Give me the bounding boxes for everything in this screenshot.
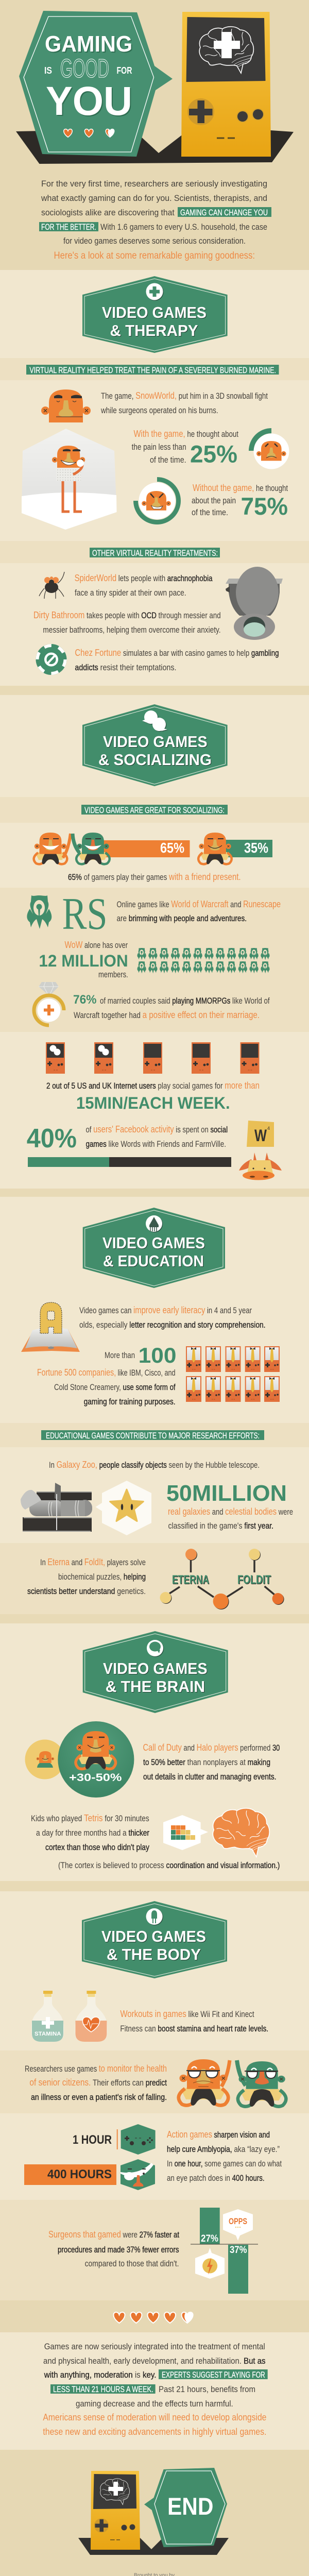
title: gaming is good for you <box>44 31 132 124</box>
text: tetris: a day for three months had a thicker <box>36 1828 149 1838</box>
banner: other treatments <box>90 548 220 558</box>
icon: brain in circle <box>147 1640 164 1657</box>
circle: player: +30-50% <box>69 1772 122 1784</box>
text: snowworld: The game, SnowWorld, put him in a 3D snowball fight <box>101 390 268 401</box>
diagram: molecule: FOLDIT <box>237 1573 271 1587</box>
bar: 400 hours <box>24 2164 116 2185</box>
stat: without the game 75%: about the pain <box>192 496 236 505</box>
stat: 40 percent facebook: of users' Facebook activity is spent on social <box>85 1124 228 1134</box>
icon: scrabble tile: W <box>254 1126 267 1145</box>
stat: 15 minutes each week: 15MIN/EACH WEEK. <box>76 1094 230 1112</box>
text: 76 percent: 76% <box>73 993 97 1007</box>
console small <box>91 2471 140 2550</box>
title: gaming is good for you: IS <box>44 65 52 76</box>
stat: 40 percent facebook <box>27 1124 228 1154</box>
text: dirty bathroom: messier bathrooms, helping them overcome their anxiety. <box>43 625 221 635</box>
text: dirty bathroom: Dirty Bathroom takes people with OCD through messier and <box>33 609 221 620</box>
conclusion text block: Games are now seriously integrated into the treatment of mental <box>44 2342 265 2351</box>
text: workouts <box>120 2008 268 2033</box>
text: surgeons <box>48 2229 179 2268</box>
text: surgeons: compared to those that didn't. <box>85 2259 179 2268</box>
text: 76 percent: Warcraft together had a positive effect on their marriage. <box>74 1009 260 1020</box>
icon: resting patient face <box>41 389 91 422</box>
heading: video games and the body <box>82 1901 227 1978</box>
intro text block: With 1.6 gamers to every U.S. household, the case <box>100 223 267 232</box>
icon: heart potion <box>75 1991 107 2042</box>
heading: video games and the body: VIDEO GAMES <box>101 1927 206 1945</box>
icon: toilet <box>226 567 283 640</box>
diagram: molecule <box>160 1549 284 1609</box>
stat: without the game 75%: Without the game, he thought <box>193 482 288 493</box>
callout: lightning hexagon <box>195 2248 225 2279</box>
stat: 40 percent facebook: 40% <box>27 1124 77 1154</box>
text: tetris <box>31 1812 150 1852</box>
icon: diamond ring <box>34 982 64 1025</box>
stat: 50 million: 50MILLION <box>166 1481 287 1506</box>
stat: 12 million: 12 MILLION <box>39 952 128 970</box>
conclusion text block: EXPERTS SUGGEST PLAYING FOR <box>162 2370 265 2380</box>
stat: 15 minutes each week <box>46 1080 260 1112</box>
text: snowworld <box>100 390 268 415</box>
icon: controller hexagon <box>121 2124 156 2155</box>
five hearts <box>114 2312 193 2323</box>
stat: 100 fortune 500 companies <box>37 1343 176 1406</box>
end speech bubble <box>144 2468 227 2547</box>
icon: figure in circle <box>146 1908 163 1925</box>
text: action games: help cure Amblyopia, aka “lazy eye.” <box>167 2145 280 2154</box>
heading: video games and education: VIDEO GAMES <box>102 1234 205 1252</box>
heading: video games and education <box>83 1208 225 1288</box>
text: call of duty and halo: Call of Duty and Halo players performed 30 <box>143 1742 280 1753</box>
text: senior citizens: Researchers use games to monitor the health <box>25 2063 167 2074</box>
bar: 400 hours: 400 HOURS <box>47 2167 112 2181</box>
callout: opps hexagon: OPPS <box>229 2216 247 2226</box>
conclusion text block: and physical health, early development, and rehabilitation. But as <box>43 2357 266 2366</box>
text: tetris: cortex than those who didn't play <box>45 1843 150 1852</box>
icon: book with letter A <box>21 1302 80 1352</box>
end notch <box>140 2538 163 2549</box>
stat: 50 million: classified in the game's first year. <box>168 1521 273 1531</box>
bar: 65 percent <box>104 840 190 857</box>
banner: great for socializing <box>81 805 228 815</box>
text: action games: Action games sharpen vision and <box>167 2129 270 2140</box>
text: chez fortune: Chez Fortune simulates a bar with casino games to help gambling <box>75 647 279 658</box>
character: orange gamer <box>34 833 71 864</box>
title: gaming is good for you: GOOD <box>60 54 109 83</box>
stat: 15 minutes each week: 2 out of 5 US and UK Internet users play social games for more than <box>46 1080 260 1091</box>
text: online games: Online games like World of Warcraft and Runescape <box>116 899 281 909</box>
stat: 100 fortune 500 companies: Cold Stone Creamery, use some form of <box>54 1383 176 1392</box>
stat: with the game 25%: 25% <box>190 440 237 468</box>
stat: 100 fortune 500 companies: gaming for training purposes. <box>84 1397 176 1406</box>
icon: star in speech hexagon <box>96 1481 151 1535</box>
icon: pencil in circle <box>146 1215 163 1232</box>
end ground shadow <box>78 2538 229 2555</box>
illustration: patient throwing snowball <box>22 429 116 530</box>
heading: video games and the body: & THE BODY <box>107 1945 201 1963</box>
stat: with the game 25%: With the game, he thought about <box>134 428 238 439</box>
conclusion text block: Americans sense of moderation will need to develop alongside <box>43 2412 266 2422</box>
stat: 50 million: real galaxies and celestial bodies were <box>168 1506 293 1517</box>
text: action games <box>167 2129 282 2183</box>
end speech bubble: END <box>167 2493 213 2520</box>
stat: 100 fortune 500 companies: Fortune 500 companies, like IBM, Cisco, and <box>37 1367 176 1378</box>
intro text block <box>39 179 271 261</box>
text: call of duty and halo: out details in clutter and managing events. <box>143 1772 276 1782</box>
text: spiderworld: face a tiny spider at their own pace. <box>75 588 186 598</box>
panel: hero <box>16 11 294 164</box>
text: senior citizens <box>25 2063 167 2102</box>
conclusion text block: gaming decrease and the effects turn harmful. <box>76 2399 233 2409</box>
intro text block: FOR THE BETTER. <box>41 223 96 232</box>
bar: 35 percent <box>226 840 272 857</box>
conclusion text block: LESS THAN 21 HOURS A WEEK. <box>53 2385 153 2394</box>
panel: end <box>78 2468 229 2576</box>
panel: video games and education <box>21 1208 293 1609</box>
heading: video games and therapy: VIDEO GAMES <box>102 303 207 321</box>
heading: video games and socializing: & SOCIALIZING <box>98 751 212 769</box>
conclusion text block: these new and exciting advancements in highly virtual games. <box>43 2427 266 2437</box>
bar: 65 percent: 65% <box>160 840 184 856</box>
icon: tetris blocks in speech hexagon <box>163 1815 208 1850</box>
icon: spider <box>39 572 64 599</box>
banner: other treatments: OTHER VIRTUAL REALITY TREATMENTS: <box>92 549 218 558</box>
bar chart: 65 with friends vs 35 without <box>34 833 272 864</box>
label: 1 hour <box>73 2129 118 2149</box>
intro text block: For the very first time, researchers are seriously investigating <box>41 179 267 189</box>
character: solo gamer <box>198 833 232 864</box>
heading: video games and the brain: & THE BRAIN <box>106 1677 205 1696</box>
heading: video games and the brain: VIDEO GAMES <box>103 1659 208 1677</box>
text: spiderworld <box>75 572 213 598</box>
text: dirty bathroom <box>33 609 221 635</box>
handheld console <box>181 12 271 157</box>
hero ground shadow <box>16 130 294 164</box>
intro text block: what exactly gaming can do for you. Scientists, therapists, and <box>41 194 267 203</box>
stat: 100 fortune 500 companies: 100 <box>139 1343 176 1367</box>
text: 76 percent <box>73 993 270 1020</box>
text: 65 percent: 65% of gamers play their games with a friend present. <box>68 871 241 882</box>
icon: scrabble tile: 4 <box>267 1126 270 1131</box>
banner: great for socializing: VIDEO GAMES ARE GREAT FOR SOCIALIZING: <box>84 806 225 815</box>
bar: 27 percent faster <box>200 2208 220 2244</box>
text: call of duty and halo <box>143 1742 280 1782</box>
panel: video games and the body <box>24 1901 286 2294</box>
icon: scrabble tile <box>247 1121 274 1147</box>
logo: runescape: RS <box>62 889 107 939</box>
text: chez fortune <box>75 647 279 672</box>
text: online games: are brimming with people and adventures. <box>116 914 247 923</box>
title: gaming is good for you: GAMING <box>45 31 132 57</box>
text: 76 percent: of married couples said playing MMORPGs like World of <box>100 996 270 1006</box>
stat: 12 million <box>39 939 128 979</box>
console d-pad <box>187 98 214 125</box>
diagram: molecule: ETERNA <box>172 1573 209 1587</box>
conclusion text block <box>43 2342 268 2437</box>
characters: senior gamers high five <box>179 2059 286 2107</box>
intro text block: for video games deserves some serious consideration. <box>63 236 246 246</box>
panel: video games and therapy <box>22 276 289 675</box>
text: senior citizens: an illness or even a patient's risk of falling. <box>31 2093 167 2102</box>
bar: 35 percent: 35% <box>244 840 268 856</box>
heading: video games and socializing: VIDEO GAMES <box>103 733 208 751</box>
text: chez fortune: addicts resist their temptations. <box>75 663 176 672</box>
character: green senior <box>237 2060 286 2107</box>
pictogram: consoles wearing ties <box>186 1346 280 1402</box>
bar: 37 percent fewer errors: 37% <box>230 2245 247 2256</box>
text: online games <box>116 899 281 923</box>
three hearts <box>64 129 114 137</box>
text: spiderworld: SpiderWorld lets people with arachnophobia <box>75 572 213 583</box>
text: tetris: Kids who played Tetris for 30 minutes <box>31 1812 149 1823</box>
text: workouts: Fitness can boost stamina and heart rate levels. <box>120 2024 268 2033</box>
text: action games: an eye patch does in 400 hours. <box>167 2174 265 2183</box>
bar: 40 percent progress <box>28 1157 231 1167</box>
character: green gamer <box>73 833 110 864</box>
bar: 27 percent faster: 27% <box>201 2233 218 2244</box>
circle: player <box>58 1721 134 1798</box>
circle: non-player <box>25 1739 65 1780</box>
panel: video games and the brain <box>25 1631 280 1870</box>
icon grid: horde crests <box>137 948 270 973</box>
title: gaming is good for you: YOU <box>46 78 132 124</box>
stat: with the game 25%: the pain less than <box>132 443 186 452</box>
panel: video games and socializing <box>27 704 282 1180</box>
icon: plus in circle <box>146 283 164 301</box>
intro text block: sociologists alike are discovering that <box>41 208 175 217</box>
heading: video games and socializing <box>82 704 228 786</box>
text: early literacy: Video games can improve early literacy in 4 and 5 year <box>79 1304 252 1315</box>
donut: 25 percent with sad face <box>251 431 289 469</box>
icon: eye patch face hexagon <box>121 2159 155 2190</box>
text: surgeons: procedures and made 37% fewer errors <box>58 2245 179 2255</box>
stat: without the game 75%: of the time. <box>192 508 228 517</box>
text: senior citizens: of senior citizens. Their efforts can predict <box>29 2077 167 2088</box>
text: early literacy <box>79 1304 266 1330</box>
stat: 40 percent facebook: games like Words with Friends and FarmVille. <box>85 1140 226 1149</box>
character: orange senior <box>179 2059 230 2106</box>
text: snowworld: while surgeons operated on his burns. <box>100 406 218 415</box>
conclusion text block: Past 21 hours, benefits from <box>159 2385 255 2394</box>
stat: 100 fortune 500 companies: More than <box>105 1351 135 1360</box>
illustration: hubble telescope <box>21 1483 92 1532</box>
bar: 37 percent fewer errors <box>228 2245 248 2294</box>
icon: farmville cow <box>239 1153 282 1180</box>
text: galaxy zoo: In Galaxy Zoo, people classify objects seen by the Hubble telescope. <box>49 1459 260 1470</box>
intro text block: GAMING CAN CHANGE YOU <box>180 208 268 217</box>
label: 1 hour: 1 HOUR <box>73 2133 112 2147</box>
diverging bar chart: surgeons <box>191 2208 258 2294</box>
text: eterna and foldit: In Eterna and FoldIt, players solve <box>40 1556 146 1567</box>
text: eterna and foldit <box>27 1556 146 1596</box>
text: eterna and foldit: biochemical puzzles, helping <box>58 1572 146 1582</box>
title speech bubble <box>19 11 173 157</box>
comparison: small non-gamer vs large gamer <box>25 1721 134 1798</box>
icon: casino chip <box>36 644 67 675</box>
console buttons <box>217 108 264 139</box>
callout: opps hexagon <box>223 2209 253 2241</box>
pictogram: 2 of 5 consoles <box>46 1042 260 1074</box>
stat: with the game 25%: of the time. <box>150 455 186 465</box>
stat: without the game 75%: 75% <box>241 493 288 520</box>
heading: video games and therapy <box>82 276 228 353</box>
text: surgeons: Surgeons that gamed were 27% faster at <box>48 2229 179 2240</box>
title: gaming is good for you: FOR <box>116 65 132 76</box>
text: workouts: Workouts in games like Wii Fit and Kinect <box>120 2008 254 2019</box>
icon: orange brain <box>213 1808 269 1857</box>
stat: 50 million <box>166 1481 293 1531</box>
text: early literacy: olds, especially letter recognition and story comprehension. <box>79 1320 266 1330</box>
vision comparison: one hour vs 400 hours <box>24 2124 156 2190</box>
stat: 12 million: WoW alone has over <box>65 939 128 950</box>
heading: video games and therapy: & THERAPY <box>110 321 198 340</box>
icon: brain with plus <box>199 27 253 73</box>
logo: horde crest <box>27 895 52 929</box>
stat: without the game 75% <box>192 482 288 520</box>
intro text block: Here's a look at some remarkable gaming goodness: <box>54 250 255 261</box>
stat: 12 million: members. <box>98 970 128 979</box>
donut: 75 percent with angry face <box>136 479 178 522</box>
stat: with the game 25% <box>132 428 238 468</box>
text: eterna and foldit: scientists better understand genetics. <box>27 1587 146 1596</box>
icon: speech bubbles <box>142 710 167 731</box>
text: action games: In one hour, some games can do what <box>167 2159 282 2168</box>
heading: video games and education: & EDUCATION <box>103 1252 204 1270</box>
heading: video games and the brain <box>83 1631 228 1713</box>
icon: stamina potion <box>31 1991 64 2042</box>
text: call of duty and halo: to 50% better than nonplayers at making <box>143 1758 270 1767</box>
text: cortex note: (The cortex is believed to process coordination and visual information.) <box>58 1861 280 1870</box>
icon: stamina potion: STAMINA <box>35 2031 61 2037</box>
conclusion text block: with anything, moderation is key. <box>44 2370 157 2380</box>
